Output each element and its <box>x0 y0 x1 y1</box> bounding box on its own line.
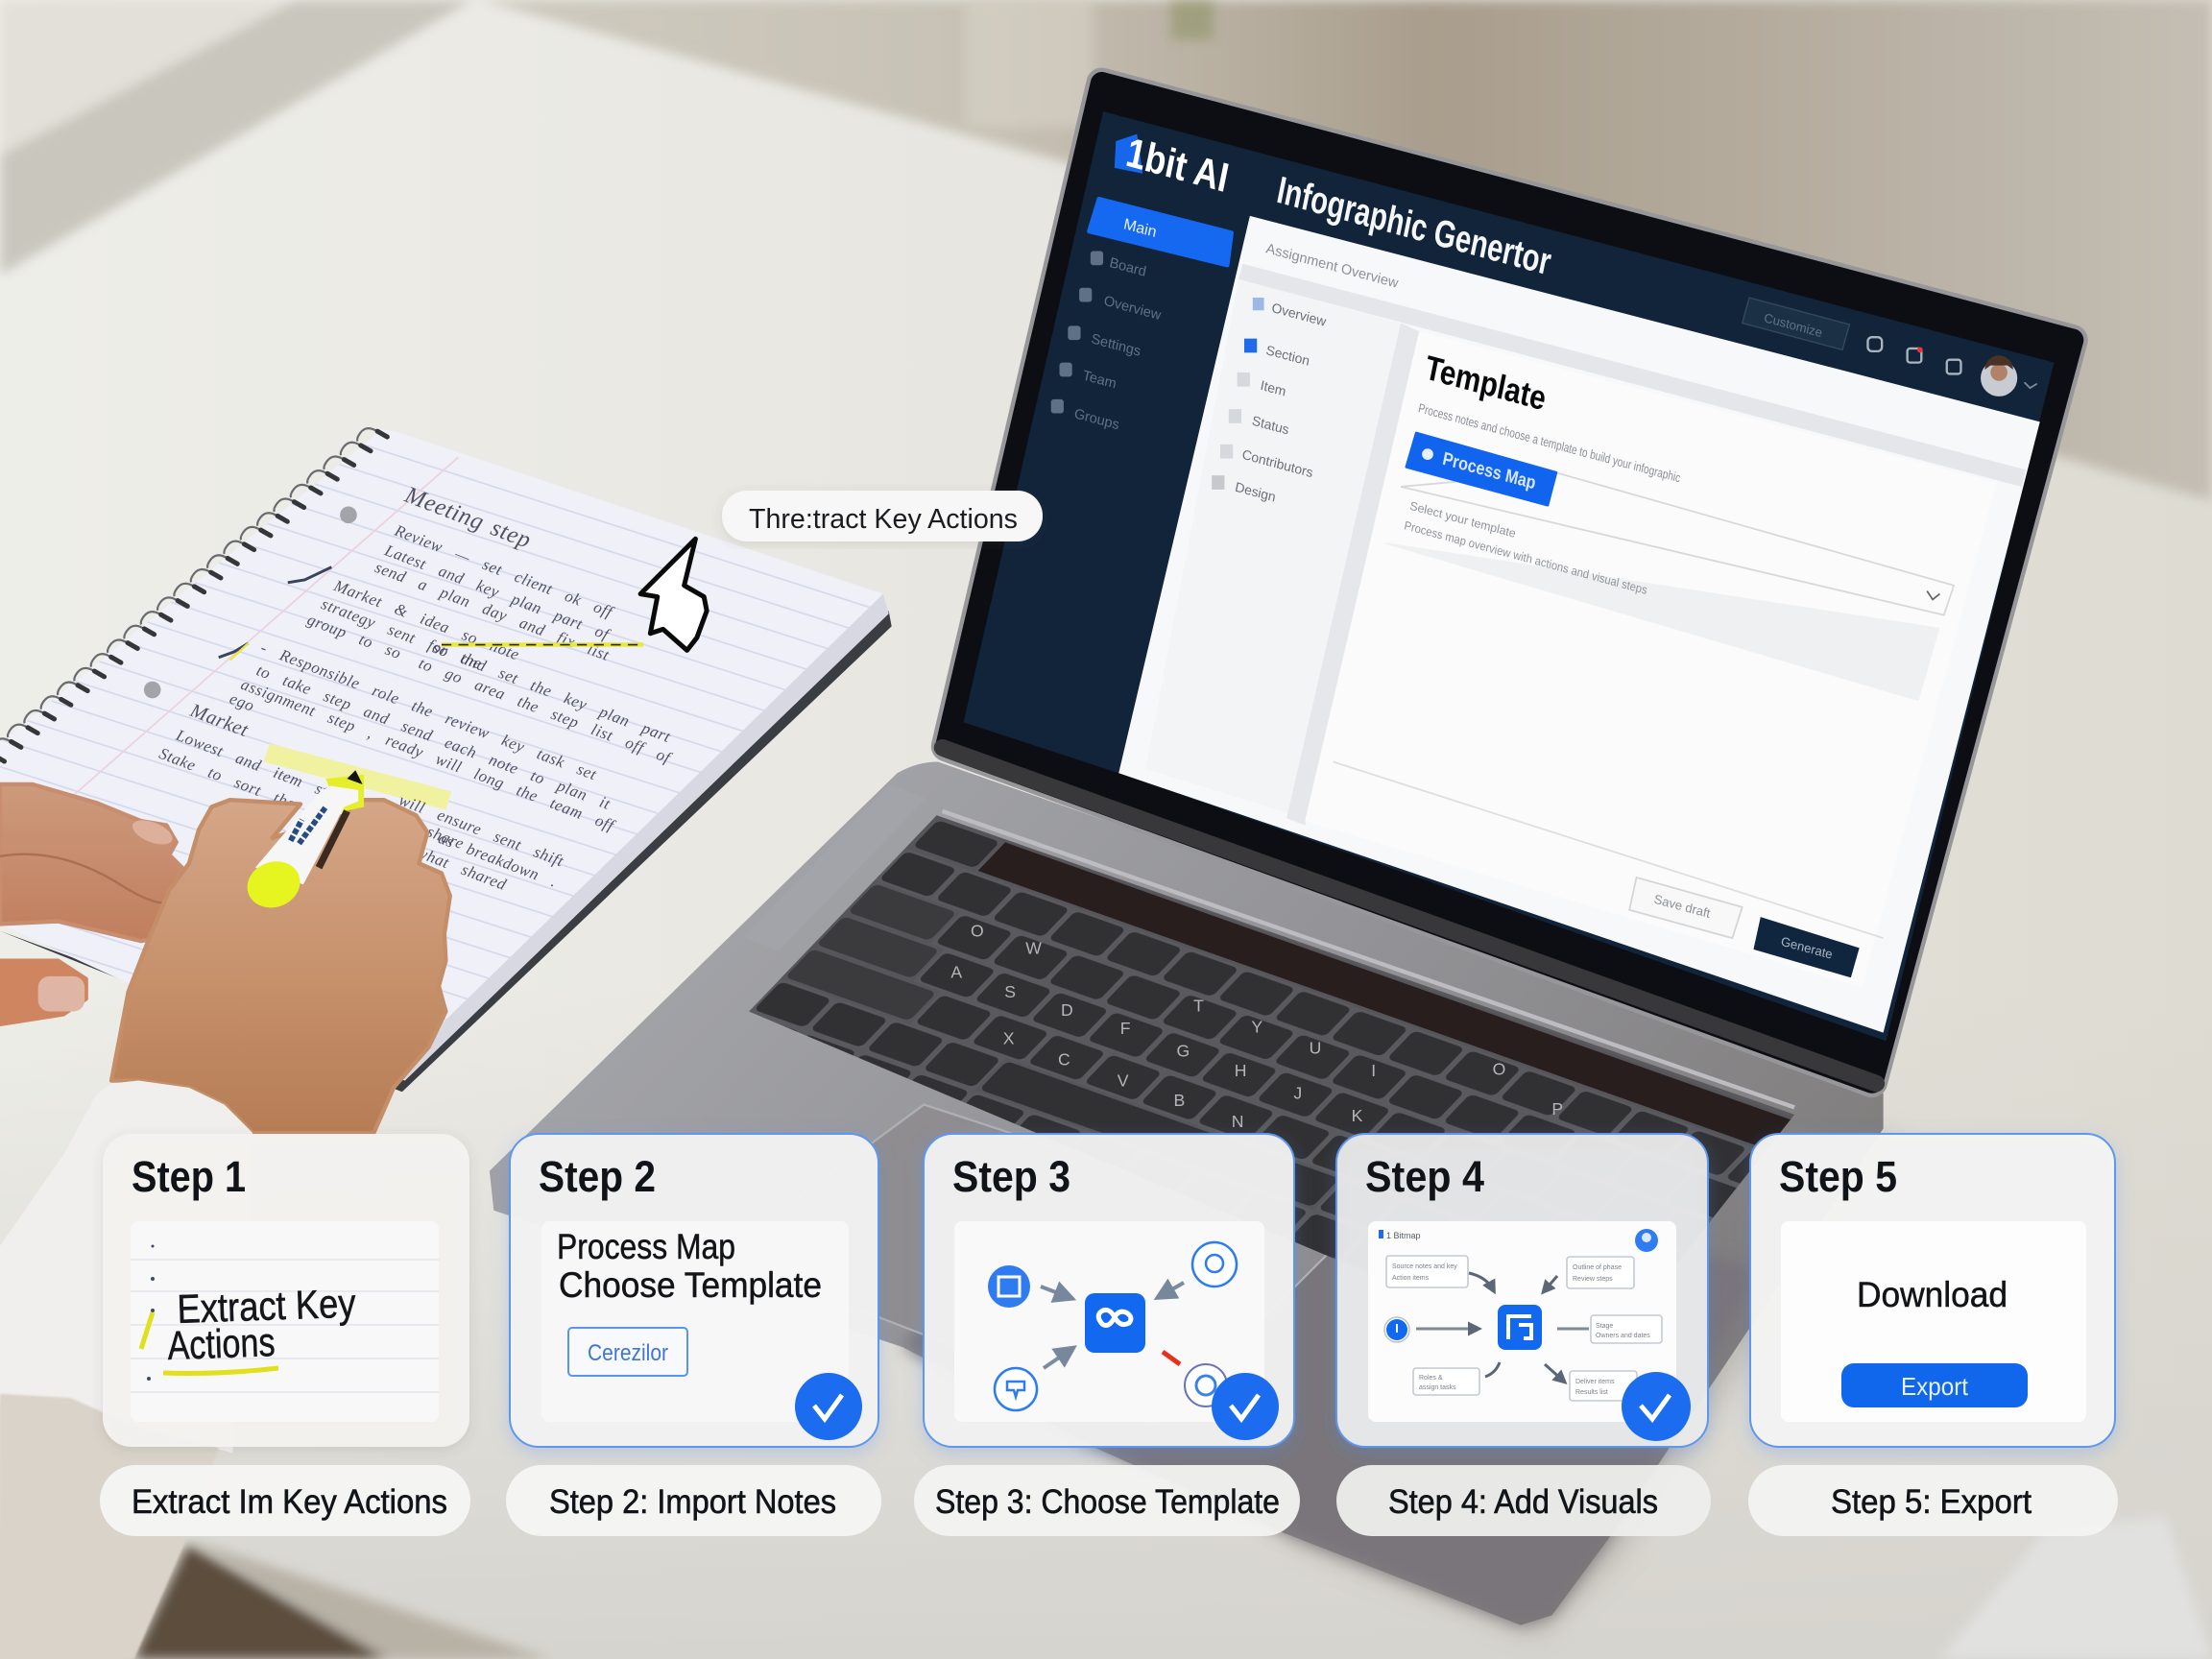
notebook <box>0 428 892 1092</box>
screen <box>964 111 2054 1041</box>
sidebar menu: Main <box>1122 215 1158 241</box>
label: step 1 <box>100 1465 470 1536</box>
node labels: Review steps <box>1573 1276 1613 1283</box>
key legends: S <box>1004 982 1016 1001</box>
sidebar menu: Settings <box>1090 331 1142 360</box>
laptop base <box>490 761 1884 1625</box>
sidebar menu: Board <box>1108 255 1147 280</box>
template diagram <box>954 1221 1264 1422</box>
breadcrumb: Assignment Overview <box>1264 241 1400 292</box>
handwritten notes: group to so <box>304 610 404 662</box>
node labels: assign tasks <box>1419 1384 1456 1391</box>
panel heading: Template: Template <box>1422 349 1550 418</box>
label: step 5 <box>1748 1465 2118 1536</box>
trackpad <box>719 1105 1340 1425</box>
right hand <box>111 800 450 1133</box>
callout: extract key actions: Thre:tract Key Actions <box>749 504 1018 535</box>
secondary menu: Section <box>1264 342 1311 369</box>
handwritten notes: ego <box>228 689 257 715</box>
secondary menu: Contributors <box>1240 446 1314 480</box>
key legends: X <box>1003 1028 1015 1047</box>
footer rule <box>1334 761 1884 938</box>
logo: 1bit AI: 1bit AI <box>1122 130 1233 202</box>
callout: extract key actions <box>722 491 1043 541</box>
node labels: Owners and dates <box>1596 1333 1650 1339</box>
key legends: N <box>1232 1112 1244 1131</box>
dashed highlight line <box>442 643 643 646</box>
key legends: J <box>1293 1084 1302 1103</box>
laptop lid <box>947 84 2073 1082</box>
shirt sleeve <box>0 1081 252 1453</box>
icon: checkmark badge <box>1622 1372 1691 1441</box>
hands holding highlighter <box>0 770 450 1659</box>
label: step 3 <box>914 1465 1300 1536</box>
key legends: H <box>1235 1061 1246 1080</box>
handwritten notes: Review — set client ok off <box>392 521 616 622</box>
handwritten notes: Market <box>186 700 252 741</box>
heading: step 1: Step 1 <box>132 1152 246 1201</box>
panel: step 5 card <box>1750 1134 2115 1447</box>
panel: step 3 card <box>924 1134 1294 1447</box>
key legends: F <box>1120 1019 1131 1038</box>
dropdown box: Process map overview with actions and visual steps <box>1403 518 1648 597</box>
sidebar menu <box>1051 199 1232 433</box>
handwritten text: Extract Key <box>177 1281 356 1332</box>
dropdown box <box>1401 472 1954 615</box>
panel description: Process notes and choose a template to build your infographic <box>1417 400 1682 485</box>
notepad illustration: Actions <box>167 1319 276 1368</box>
panel: step 1 card <box>103 1134 469 1447</box>
generate button <box>568 1328 687 1376</box>
node labels <box>1392 1263 1650 1396</box>
key legends: G <box>1176 1042 1190 1061</box>
Process Map button: Process Map <box>1441 449 1537 493</box>
handwritten notes: - Responsible role the review key task set <box>258 638 600 784</box>
app title: Infographic Genertor <box>1274 169 1554 283</box>
heading: step 3: Step 3 <box>952 1152 1070 1201</box>
download panel: Download <box>1857 1275 2008 1314</box>
icon: image node <box>988 1265 1030 1308</box>
key rows <box>874 848 1780 1190</box>
highlighter <box>241 770 364 915</box>
label: step 5: Step 5: Export <box>1831 1483 2032 1521</box>
keyboard <box>749 809 1795 1260</box>
mini logo: 1 Bitmap <box>1386 1231 1421 1240</box>
header icons <box>1867 337 1960 373</box>
template selection: Choose Template <box>559 1265 822 1305</box>
Generate button <box>1753 917 1860 977</box>
arrows <box>1041 1283 1184 1368</box>
sidebar menu: Overview <box>1102 294 1163 324</box>
handwritten notes: Market & idea so note <box>330 576 522 664</box>
key legends: I <box>1371 1061 1376 1080</box>
notepad illustration <box>131 1221 439 1422</box>
key legends <box>950 922 1563 1131</box>
header button <box>1743 298 1849 349</box>
key legends: U <box>1310 1039 1321 1058</box>
handwritten notes <box>156 482 675 894</box>
handwritten notes: so and set the key plan part <box>430 638 674 746</box>
export button <box>1841 1363 2028 1407</box>
step label pills <box>100 1465 2118 1536</box>
key legends: C <box>1058 1049 1070 1069</box>
icon: checkmark badge <box>795 1373 862 1440</box>
node labels: Stage <box>1596 1323 1613 1330</box>
heading: step 5: Step 5 <box>1779 1152 1897 1201</box>
mouse <box>1939 1517 2212 1659</box>
center hub <box>1498 1305 1542 1350</box>
Generate button: Generate <box>1780 934 1834 962</box>
icon: checkmark badge <box>1212 1373 1279 1440</box>
keyboard top rim <box>943 811 1794 1107</box>
window at top left <box>0 0 472 276</box>
shadow under laptop <box>1286 1129 1897 1636</box>
handwritten notes: Latest and key plan part of <box>381 541 613 644</box>
node labels: Roles & <box>1419 1375 1443 1382</box>
template selection: Cerezilor <box>588 1340 668 1366</box>
label: step 4: Step 4: Add Visuals <box>1388 1483 1658 1521</box>
white content area <box>1118 216 2040 1033</box>
sidebar menu: Team <box>1081 369 1118 393</box>
highlighted phrase <box>264 743 451 809</box>
node labels: Action items <box>1392 1275 1430 1282</box>
key legends: A <box>950 962 962 981</box>
key legends: O <box>1493 1060 1505 1079</box>
handwritten notes: to take step and send each note to plan it <box>254 661 613 813</box>
header button: Customize <box>1763 310 1823 340</box>
wide keys <box>843 880 875 913</box>
handwritten notes: send a plan day and fix list <box>373 558 613 664</box>
handwritten notes: will ensure sent shift <box>397 791 567 871</box>
function row <box>906 816 1791 1119</box>
key legends: W <box>1025 938 1042 957</box>
icon: idea node <box>1192 1242 1237 1286</box>
template selection <box>541 1221 849 1422</box>
dropdown box: Select your template <box>1408 499 1517 541</box>
handwritten notes: Meeting step <box>400 482 535 554</box>
check marks <box>219 567 331 658</box>
handwritten notes: as breakdown . <box>436 829 560 891</box>
blurred near edge of base <box>902 1171 1764 1625</box>
navy app frame <box>964 111 2054 1041</box>
cursor icon <box>640 539 707 650</box>
handwritten notes: strategy sent for the <box>319 594 485 673</box>
heading: step 4: Step 4 <box>1365 1152 1484 1201</box>
icon: chat node <box>995 1368 1037 1410</box>
handwritten notes: assignment step , ready will long the team off <box>238 675 618 835</box>
main panel <box>1305 331 1996 988</box>
speaker grille <box>743 784 926 950</box>
download panel: Export <box>1901 1372 1969 1401</box>
heading: step 2: Step 2 <box>539 1152 656 1201</box>
handwritten notes: Stake to sort the idea on and what shared <box>156 744 509 894</box>
key legends: T <box>1193 997 1204 1016</box>
panel: step 2 card <box>510 1134 878 1447</box>
yellow highlight marks <box>141 1312 278 1373</box>
node labels: Source notes and key <box>1392 1263 1457 1270</box>
node labels: Deliver items <box>1575 1379 1615 1385</box>
node boxes <box>1386 1256 1662 1401</box>
key legends: D <box>1061 1000 1073 1020</box>
curtain and plant <box>967 0 1214 127</box>
key legends: P <box>1551 1099 1563 1118</box>
icon: target node <box>1185 1364 1227 1407</box>
connectors <box>1416 1273 1589 1381</box>
secondary menu: Design <box>1234 479 1277 505</box>
text area <box>1382 543 1939 701</box>
key legends: K <box>1352 1106 1363 1125</box>
panel: step 4 card <box>1336 1134 1708 1447</box>
left hand <box>0 784 182 1024</box>
secondary menu: Overview <box>1270 300 1329 329</box>
sidebar menu: Groups <box>1072 406 1120 433</box>
node labels: Outline of phase <box>1573 1264 1622 1271</box>
Process Map button <box>1407 433 1556 505</box>
label: step 4 <box>1336 1465 1711 1536</box>
label: step 2: Step 2: Import Notes <box>549 1483 836 1521</box>
back wall <box>480 0 2212 501</box>
template selection: Process Map <box>557 1227 735 1266</box>
secondary menu: Status <box>1251 413 1290 438</box>
label: step 2 <box>506 1465 881 1536</box>
Save button: Save draft <box>1653 892 1712 921</box>
hinge band <box>943 748 1876 1083</box>
icon: center hub <box>1085 1293 1145 1353</box>
floor and table edge <box>134 1539 550 1659</box>
secondary menu <box>1212 298 1329 505</box>
spiral binding <box>0 428 387 765</box>
visual process map <box>1368 1221 1676 1422</box>
key legends: Y <box>1251 1018 1262 1037</box>
key legends: O <box>971 922 984 941</box>
node labels: Results list <box>1575 1389 1608 1396</box>
user avatar <box>1981 355 2037 397</box>
left node <box>1384 1317 1409 1342</box>
label: step 3: Step 3: Choose Template <box>935 1483 1280 1521</box>
label: step 1: Extract Im Key Actions <box>132 1483 447 1521</box>
download panel <box>1781 1221 2086 1422</box>
secondary menu: Item <box>1260 377 1287 399</box>
key legends: V <box>1118 1070 1129 1090</box>
key legends: B <box>1174 1091 1185 1110</box>
laptop <box>490 84 2073 1636</box>
handwritten notes: to go area the step list off of <box>417 654 675 768</box>
Save button <box>1629 878 1743 938</box>
handwritten notes: Lowest and item start then to share <box>173 726 467 853</box>
